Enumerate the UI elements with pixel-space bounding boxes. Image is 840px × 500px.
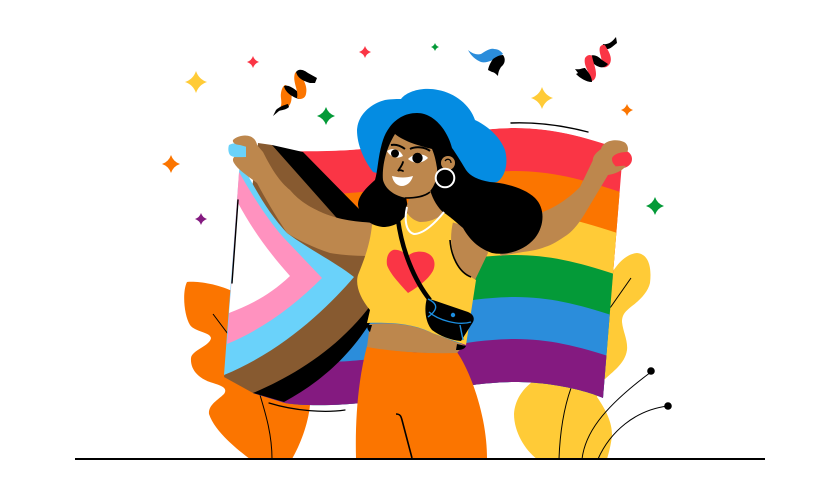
ribbon: orange left xyxy=(273,70,317,116)
pants xyxy=(356,346,487,458)
ear xyxy=(441,156,455,170)
chevron: black xyxy=(240,145,420,402)
left eye xyxy=(387,149,403,158)
chevron: pink xyxy=(227,172,322,344)
flag peek between hair and chin xyxy=(406,197,414,208)
earring xyxy=(436,169,454,187)
chevron: white xyxy=(229,203,290,313)
flag xyxy=(224,128,622,406)
sparkle: red xyxy=(247,56,259,68)
tank top xyxy=(357,200,476,345)
ribbon: blue xyxy=(468,49,505,76)
neck xyxy=(406,190,444,222)
sparkle: red center xyxy=(359,46,371,58)
right arm xyxy=(500,150,620,256)
ribbon: red right xyxy=(575,37,617,82)
necklace xyxy=(406,207,444,234)
sparkles xyxy=(162,43,664,225)
sparkle: yellow large left xyxy=(185,71,207,93)
right eye xyxy=(408,153,428,163)
left hand fingers xyxy=(233,135,257,149)
fanny pack xyxy=(367,298,474,350)
pants crease xyxy=(396,414,412,458)
sparkle: orange right xyxy=(621,104,633,116)
sparkle: green right xyxy=(646,197,664,215)
right yellow plant xyxy=(514,253,650,459)
right grass stalks with dots xyxy=(582,367,672,459)
flag corner: left xyxy=(228,143,246,157)
midriff xyxy=(367,323,464,353)
mouth xyxy=(392,176,413,186)
right hand fingers xyxy=(593,140,628,175)
eyebrows xyxy=(391,145,430,151)
hat xyxy=(357,89,506,190)
chin line xyxy=(405,192,430,198)
head xyxy=(383,134,437,198)
chevron: light blue xyxy=(224,160,354,375)
flag motion lines xyxy=(232,123,588,411)
face xyxy=(383,134,455,198)
hair xyxy=(358,113,542,254)
bag strap xyxy=(398,220,430,300)
sparkle: purple xyxy=(195,213,207,225)
ground line xyxy=(75,458,765,460)
left orange plant xyxy=(184,282,310,459)
sparkle: orange left xyxy=(162,155,180,173)
sparkle: yellow right xyxy=(531,87,553,109)
right arm crease xyxy=(450,240,471,277)
right shoulder xyxy=(451,222,488,280)
rainbow stripes xyxy=(253,128,622,406)
flag corner: right xyxy=(612,150,632,168)
heart xyxy=(387,250,435,293)
left arm xyxy=(233,142,378,256)
sparkle: green small xyxy=(431,43,439,51)
sparkle: green left xyxy=(317,107,335,125)
chevron: brown xyxy=(224,143,390,393)
nose xyxy=(398,162,403,171)
illustration: woman holding a progress pride flag xyxy=(75,37,765,460)
